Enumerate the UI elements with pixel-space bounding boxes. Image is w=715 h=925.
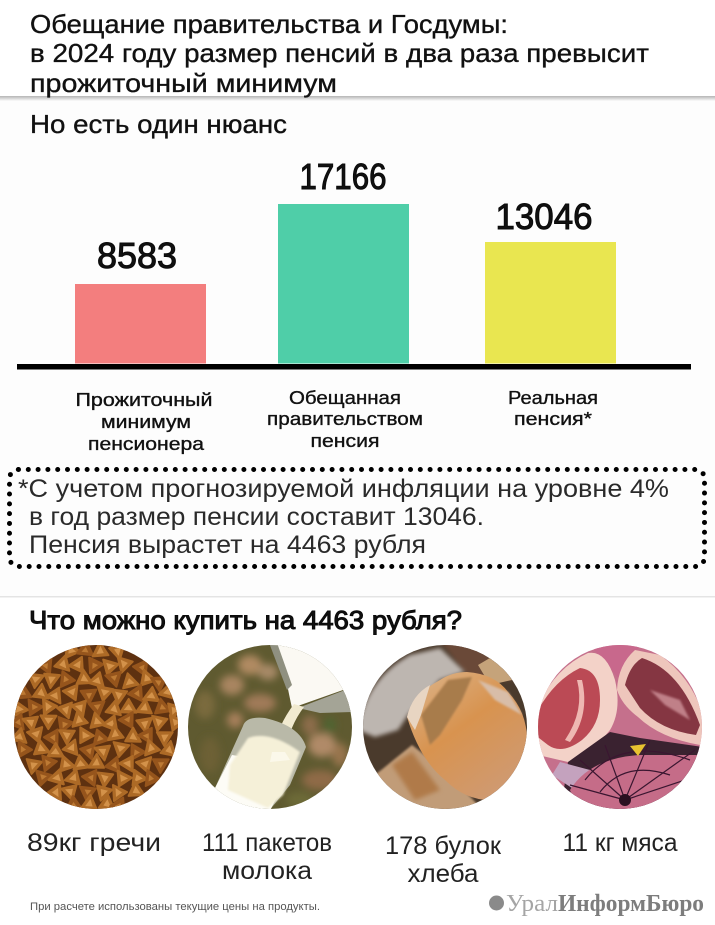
photo: buckwheat [14,645,178,809]
caption: milk [202,829,332,885]
title [30,9,649,98]
label: real pension: Реальная [508,388,598,408]
title: прожиточный минимум [30,68,337,98]
lower meat in net [564,732,700,809]
photo: milk [188,645,352,809]
label: promised pension: Обещанная [289,388,401,408]
title: в 2024 году размер пенсий в два раза превысит [30,38,649,68]
bar: real pension [485,196,616,364]
logo: UralInformBureau: Урал [506,891,558,917]
bar: promised pension [278,156,409,364]
bar: subsistence minimum: 8583 [97,235,177,276]
caption: bread: 178 булок [385,832,502,860]
callout: dotted note: *С учетом прогнозируемой инфляции на уровне 4% [18,475,669,503]
caption: meat: 11 кг мяса [562,829,678,857]
stream [282,704,304,729]
background: middle section [0,98,715,596]
callout: dotted note [10,470,704,566]
bar: subsistence minimum [75,235,206,364]
subtitle: Но есть один нюанс [30,109,287,139]
title: Обещание правительства и Госдумы: [30,9,508,39]
caption: milk: молока [222,857,312,885]
label: promised pension: правительством [267,409,423,429]
caption: buckwheat: 89кг гречи [27,829,161,857]
label: real pension [508,388,598,429]
label: subsistence minimum: пенсионера [88,434,205,454]
bar: promised pension: 17166 [300,156,386,197]
left ham [532,653,618,762]
photo: bread [358,640,527,815]
header divider shadow [0,96,715,101]
label: promised pension: пенсия [310,431,380,451]
section divider [0,596,715,598]
caption: milk: 111 пакетов [202,829,332,857]
footnote: При расчете использованы текущие цены на продукты. [30,901,320,913]
logo: UralInformBureau [489,891,704,917]
callout: dotted note: в год размер пенсии составит 13046. [29,503,484,531]
glass [215,718,306,809]
caption: bread: хлеба [408,860,479,888]
bar: real pension: 13046 [496,196,592,237]
right ham [617,650,706,745]
label: subsistence minimum [76,390,212,454]
jug [270,645,343,708]
bar chart [17,156,691,370]
photo: meat [538,645,702,809]
heading: what can be bought: Что можно купить на 4463 рубля? [29,605,462,635]
logo: UralInformBureau: ИнформБюро [558,891,704,917]
caption: bread [385,832,502,888]
label: subsistence minimum: минимум [101,412,191,432]
label: promised pension [267,388,423,451]
label: subsistence minimum: Прожиточный [76,390,212,410]
chart axis [17,364,691,370]
callout: dotted note: Пенсия вырастет на 4463 рубля [29,531,426,559]
label: real pension: пенсия* [514,409,592,429]
